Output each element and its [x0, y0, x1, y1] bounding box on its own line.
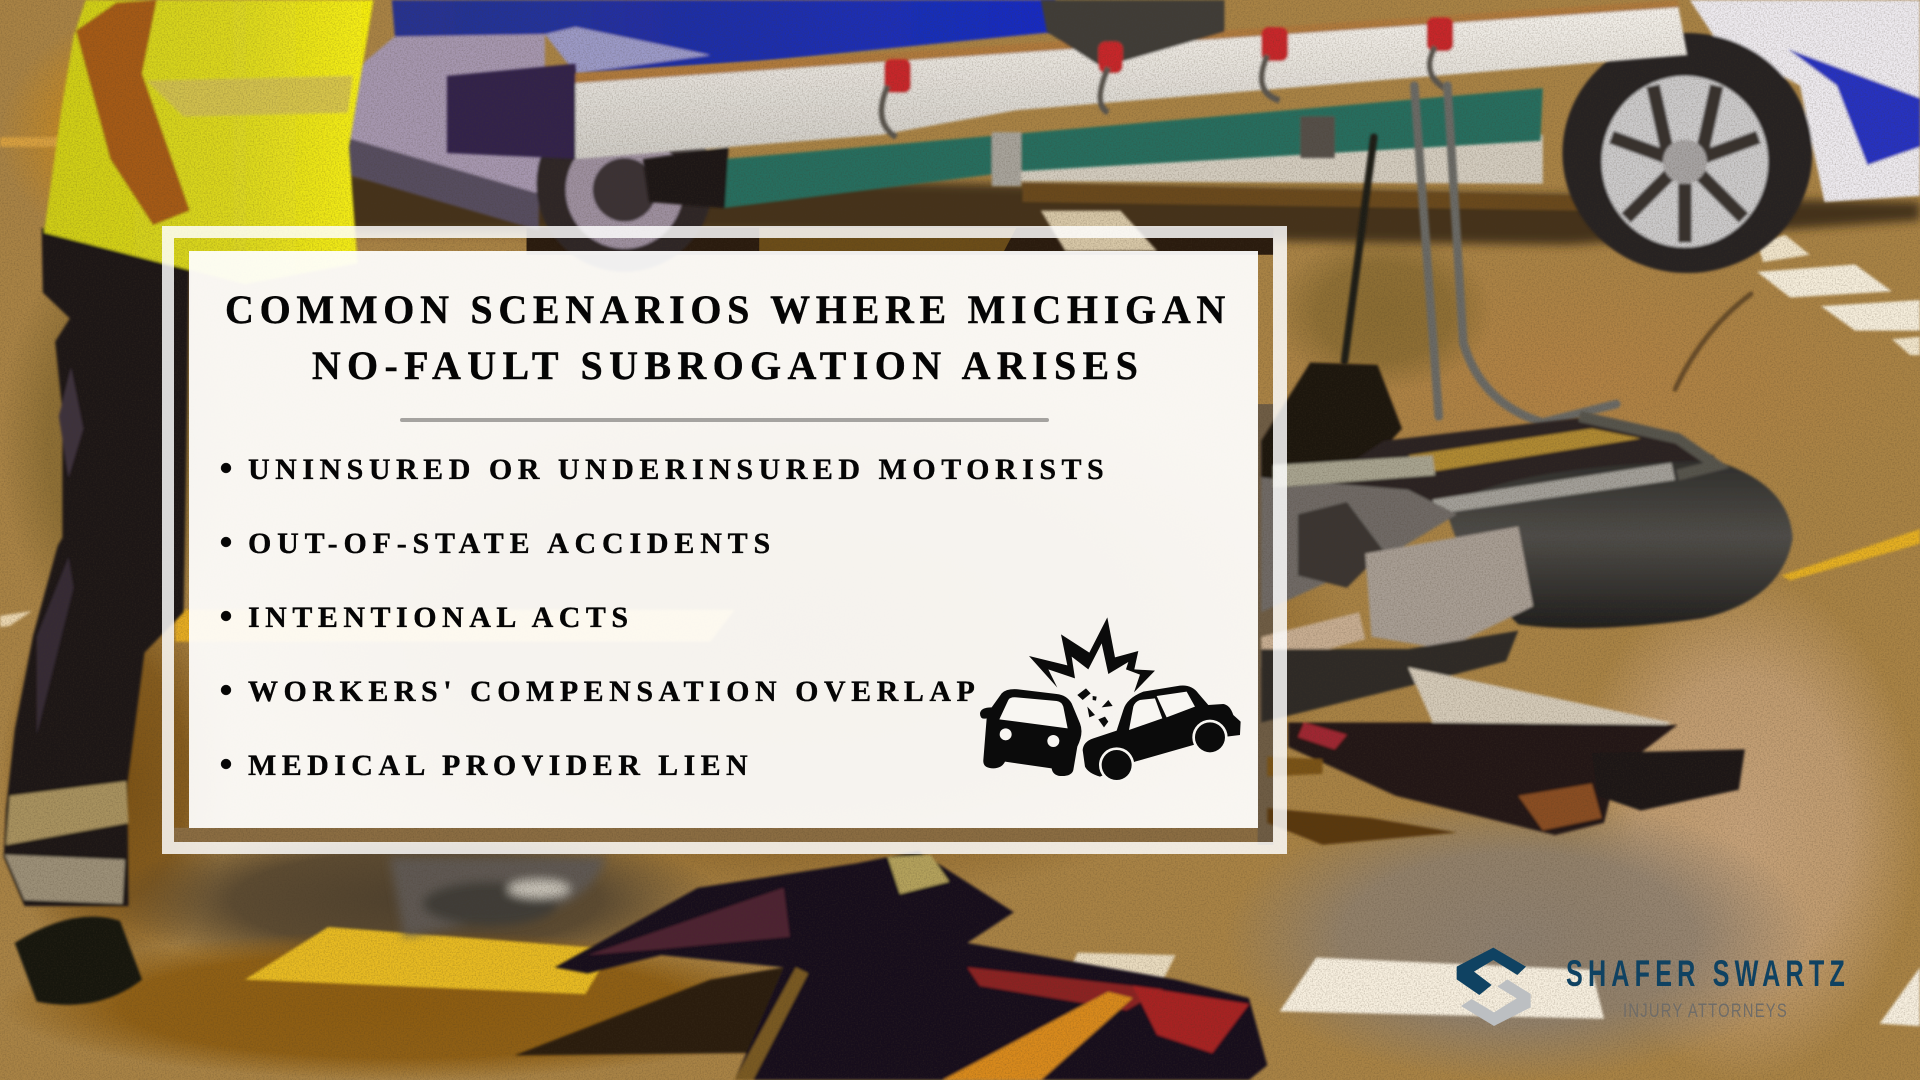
blurred boot near the panel bottom: [389, 857, 606, 937]
divider: [400, 418, 1049, 422]
title: [225, 287, 1231, 388]
logo mark: [1457, 948, 1531, 1026]
list item: intentional acts: INTENTIONAL ACTS: [248, 601, 634, 634]
logo tagline: INJURY ATTORNEYS: [1623, 1000, 1787, 1021]
logo: Shafer Swartz Injury Attorneys: [1457, 948, 1845, 1026]
icon: two cars colliding: [980, 617, 1241, 783]
worker in high-visibility vest: [4, 0, 373, 1005]
panel: translucent white content card: [189, 251, 1258, 828]
list item: workers compensation: WORKERS' COMPENSATION OVERLAP: [248, 675, 980, 708]
scenario list: [221, 453, 1109, 782]
list item: medical lien: MEDICAL PROVIDER LIEN: [248, 749, 753, 782]
crashed fairing in the foreground: [514, 851, 1267, 1080]
straps hanging from stretcher: [1344, 86, 1751, 422]
title: NO-FAULT SUBROGATION ARISES: [312, 343, 1144, 388]
title: COMMON SCENARIOS WHERE MICHIGAN: [225, 287, 1231, 332]
list item: out of state: OUT-OF-STATE ACCIDENTS: [248, 527, 776, 560]
police car rear wheel and body: [1562, 0, 1920, 273]
motorcycle laying on the road: [1261, 362, 1793, 845]
tow stretcher: [447, 0, 1687, 208]
list item: uninsured: UNINSURED OR UNDERINSURED MOTORISTS: [248, 453, 1109, 486]
police car behind the stretcher: [337, 0, 1580, 272]
logo wordmark: SHAFER SWARTZ: [1566, 952, 1845, 994]
panel: translucent white frame: [162, 226, 1287, 854]
